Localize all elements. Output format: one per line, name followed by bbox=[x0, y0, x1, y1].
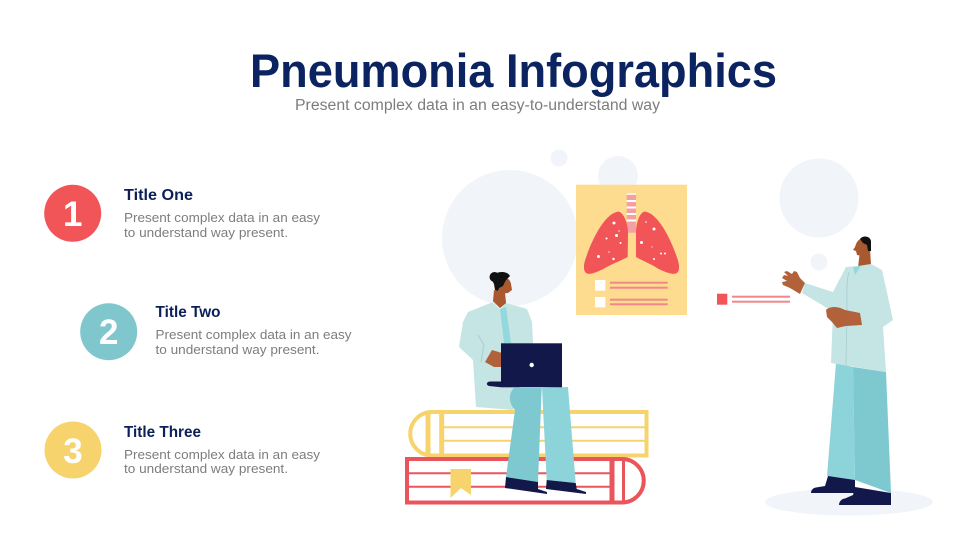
bookmark bbox=[450, 469, 471, 498]
hair bbox=[860, 237, 871, 251]
rear leg bbox=[542, 387, 576, 483]
trachea bbox=[627, 193, 636, 233]
front leg bbox=[506, 388, 542, 482]
background bubbles right bbox=[780, 158, 858, 270]
badge 1 bbox=[44, 185, 101, 242]
neck bbox=[493, 290, 506, 308]
hair bun bbox=[490, 272, 500, 282]
upper hand bbox=[782, 271, 805, 294]
callout legend bbox=[717, 294, 790, 305]
lab coat bbox=[802, 264, 893, 372]
neck front bbox=[493, 296, 506, 308]
item 2 bbox=[80, 303, 352, 360]
title: Pneumonia Infographics bbox=[250, 44, 777, 97]
item 3 body: Present complex data in an easy bbox=[124, 447, 321, 462]
poster checklist bbox=[595, 280, 668, 307]
face bbox=[496, 276, 512, 293]
red book bbox=[407, 459, 644, 502]
yellow book bbox=[410, 412, 646, 456]
item 2 body line 2: to understand way present. bbox=[156, 342, 320, 357]
subtitle: Present complex data in an easy-to-understand way bbox=[295, 97, 660, 114]
neck bbox=[858, 248, 871, 268]
coat center seam bbox=[846, 272, 849, 366]
laptop bbox=[487, 343, 562, 387]
badge 2 bbox=[80, 303, 137, 360]
shoes bbox=[811, 476, 891, 505]
item 1 body line 2: to understand way present. bbox=[124, 225, 288, 240]
lower hand bbox=[826, 307, 862, 328]
badge 2: 2 bbox=[99, 313, 118, 352]
left lung bbox=[584, 212, 628, 274]
item 3 heading: Title Three bbox=[124, 424, 201, 441]
hand bbox=[485, 350, 502, 367]
seated doctor bbox=[459, 272, 586, 494]
shoes bbox=[505, 477, 586, 494]
background bubbles left bbox=[442, 150, 638, 306]
floor shadow bbox=[765, 488, 933, 516]
x-ray poster bbox=[576, 185, 687, 315]
collar bbox=[853, 266, 861, 275]
coat fold bbox=[478, 335, 484, 362]
right lung bbox=[636, 212, 679, 274]
item 2 heading: Title Two bbox=[156, 304, 221, 321]
item 1 bbox=[44, 185, 321, 242]
standing doctor bbox=[782, 237, 893, 505]
item 1 heading: Title One bbox=[124, 187, 193, 204]
tie bbox=[500, 307, 511, 343]
badge 3: 3 bbox=[63, 432, 83, 471]
head bbox=[853, 238, 871, 256]
lung spots bbox=[597, 221, 666, 260]
lab coat bbox=[459, 302, 533, 410]
item 2 body: Present complex data in an easy bbox=[156, 327, 352, 342]
hair bbox=[491, 272, 510, 291]
item 1 body: Present complex data in an easy bbox=[124, 210, 321, 225]
badge 1: 1 bbox=[63, 195, 82, 234]
item 3 bbox=[44, 422, 321, 478]
legs bbox=[827, 363, 891, 493]
item 3 body line 2: to understand way present. bbox=[124, 461, 288, 476]
badge 3 bbox=[44, 422, 102, 478]
